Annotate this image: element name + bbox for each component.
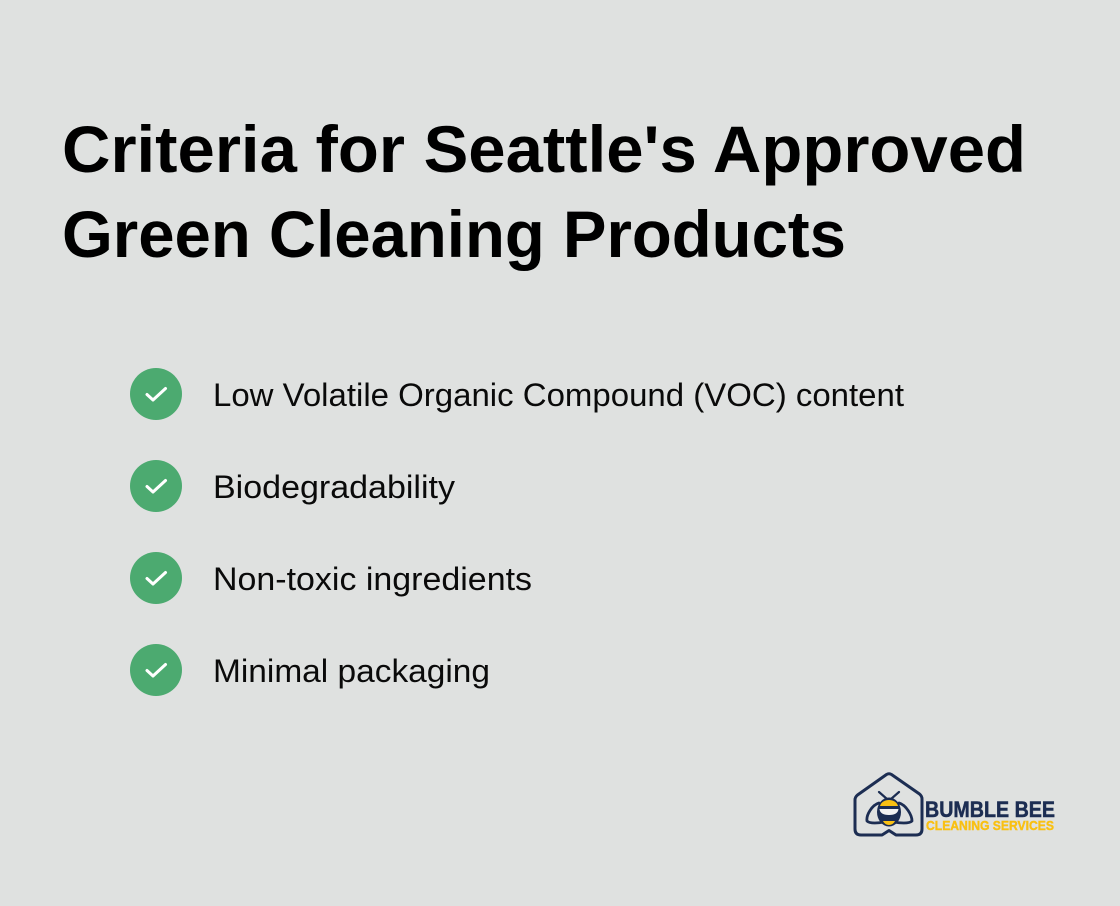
title: Green Cleaning Products [62, 197, 846, 271]
item: low VOC content [130, 368, 904, 420]
title: Criteria for Seattle's Approved [62, 112, 1026, 186]
icon: house with bee [855, 774, 922, 835]
item: non-toxic ingredients [130, 552, 532, 604]
item: biodegradability [130, 460, 455, 512]
bee wings [867, 803, 912, 823]
item: low VOC content: Low Volatile Organic Compound (VOC) content [213, 377, 904, 413]
checklist [130, 368, 904, 696]
bee body [877, 798, 901, 826]
item: biodegradability: Biodegradability [213, 469, 455, 505]
item: minimal packaging [130, 644, 490, 696]
logo name: BUMBLE BEE [925, 797, 1055, 822]
logo: Bumble Bee Cleaning Services [855, 774, 1055, 835]
title [62, 112, 1026, 271]
item: non-toxic ingredients: Non-toxic ingredients [213, 561, 532, 597]
item: minimal packaging: Minimal packaging [213, 653, 490, 689]
bee antennae [879, 792, 899, 799]
logo tagline: CLEANING SERVICES [926, 819, 1054, 833]
